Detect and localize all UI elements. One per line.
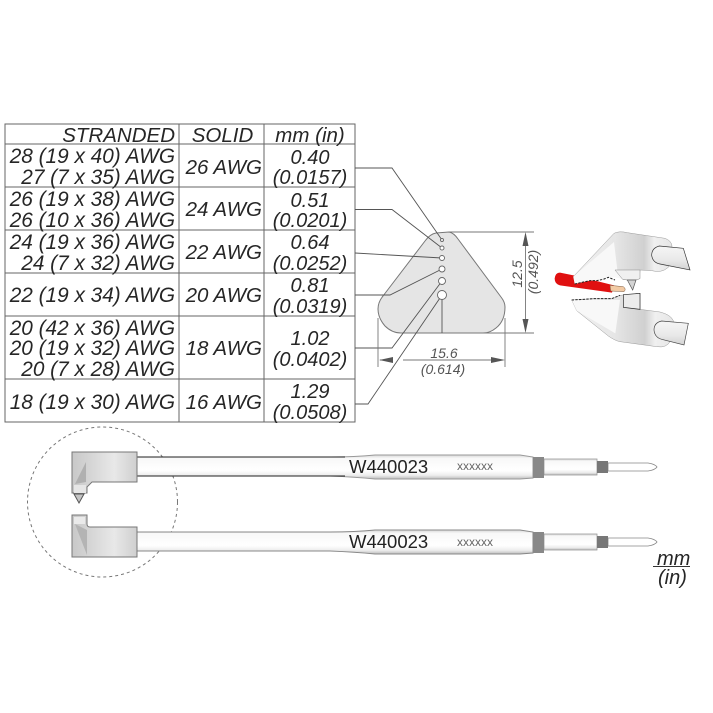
lower shaft (654, 321, 688, 345)
head (72, 452, 137, 493)
wire size table (5, 124, 355, 424)
profile shape (378, 232, 505, 333)
stranded column: 18 (19 x 30) AWG (10, 391, 175, 414)
cutting holes (438, 238, 446, 300)
head (72, 515, 137, 557)
stranded column: 22 (19 x 34) AWG (9, 284, 175, 307)
stranded column: 20 (19 x 32) AWG (9, 337, 175, 360)
stranded column: 26 (10 x 36) AWG (9, 209, 175, 232)
mm and inch column: 1.02 (291, 328, 329, 350)
mm and inch column: (0.0157) (273, 167, 347, 189)
stranded column: 20 (7 x 28) AWG (20, 358, 175, 381)
stranded column: 28 (19 x 40) AWG (9, 145, 175, 168)
unit legend: (in) (658, 567, 687, 589)
stranded column: 24 (19 x 36) AWG (9, 231, 175, 254)
lower tool (72, 515, 657, 557)
mm and inch column: (0.0319) (273, 296, 347, 318)
cutter profile diagram (355, 168, 541, 404)
width dimension: 15.6 (430, 345, 458, 361)
mm and inch column: (0.0402) (273, 349, 347, 371)
mm and inch column: (0.0252) (273, 253, 347, 275)
solid column: 22 AWG (185, 241, 262, 264)
mm and inch column: 0.64 (291, 232, 329, 254)
unit legend: mm (657, 548, 690, 570)
stranded column: 24 (7 x 32) AWG (20, 252, 175, 275)
table header (62, 124, 345, 147)
detail circle (28, 427, 178, 577)
mm and inch column: (0.0508) (273, 402, 347, 424)
mm and inch column: 0.51 (291, 190, 329, 212)
shaft (137, 455, 533, 479)
unit legend (653, 548, 690, 589)
mm and inch column (273, 147, 347, 424)
mm and inch column: 0.40 (291, 147, 329, 169)
upper tool (72, 452, 657, 503)
part number: W440023 (349, 456, 428, 477)
red wire (555, 273, 625, 293)
stranded column: 26 (19 x 38) AWG (9, 188, 175, 211)
height dimension (449, 232, 541, 333)
height dimension: 12.5 (509, 260, 525, 288)
icon: cutter jaws with red wire (555, 232, 690, 347)
leader lines (355, 168, 442, 404)
code: xxxxxx (457, 459, 493, 473)
solid column: 18 AWG (186, 337, 262, 360)
stranded column (9, 145, 175, 414)
width dimension: (0.614) (421, 361, 465, 377)
mm and inch column: 0.81 (291, 275, 329, 297)
table header: mm (in) (275, 124, 345, 147)
stranded column: 27 (7 x 35) AWG (20, 166, 175, 189)
solid column: 20 AWG (185, 284, 262, 307)
table header: STRANDED (62, 124, 175, 147)
solid column: 16 AWG (186, 391, 262, 414)
width dimension (378, 318, 505, 377)
stranded column: 20 (42 x 36) AWG (9, 317, 175, 340)
table header: SOLID (192, 124, 253, 147)
solid column: 26 AWG (185, 156, 262, 179)
solid column (185, 156, 262, 414)
mm and inch column: (0.0201) (273, 210, 347, 232)
tip (74, 494, 84, 503)
upper jaw (573, 232, 690, 290)
code: xxxxxx (457, 535, 493, 549)
height dimension: (0.492) (525, 250, 541, 294)
gray bands and pin (544, 459, 597, 475)
gray bands and pin (544, 534, 597, 550)
upper shaft (652, 246, 690, 270)
part number: W440023 (349, 531, 428, 552)
lower jaw (572, 293, 688, 347)
solid column: 24 AWG (185, 198, 262, 221)
mm and inch column: 1.29 (291, 381, 329, 403)
shaft (137, 530, 533, 554)
